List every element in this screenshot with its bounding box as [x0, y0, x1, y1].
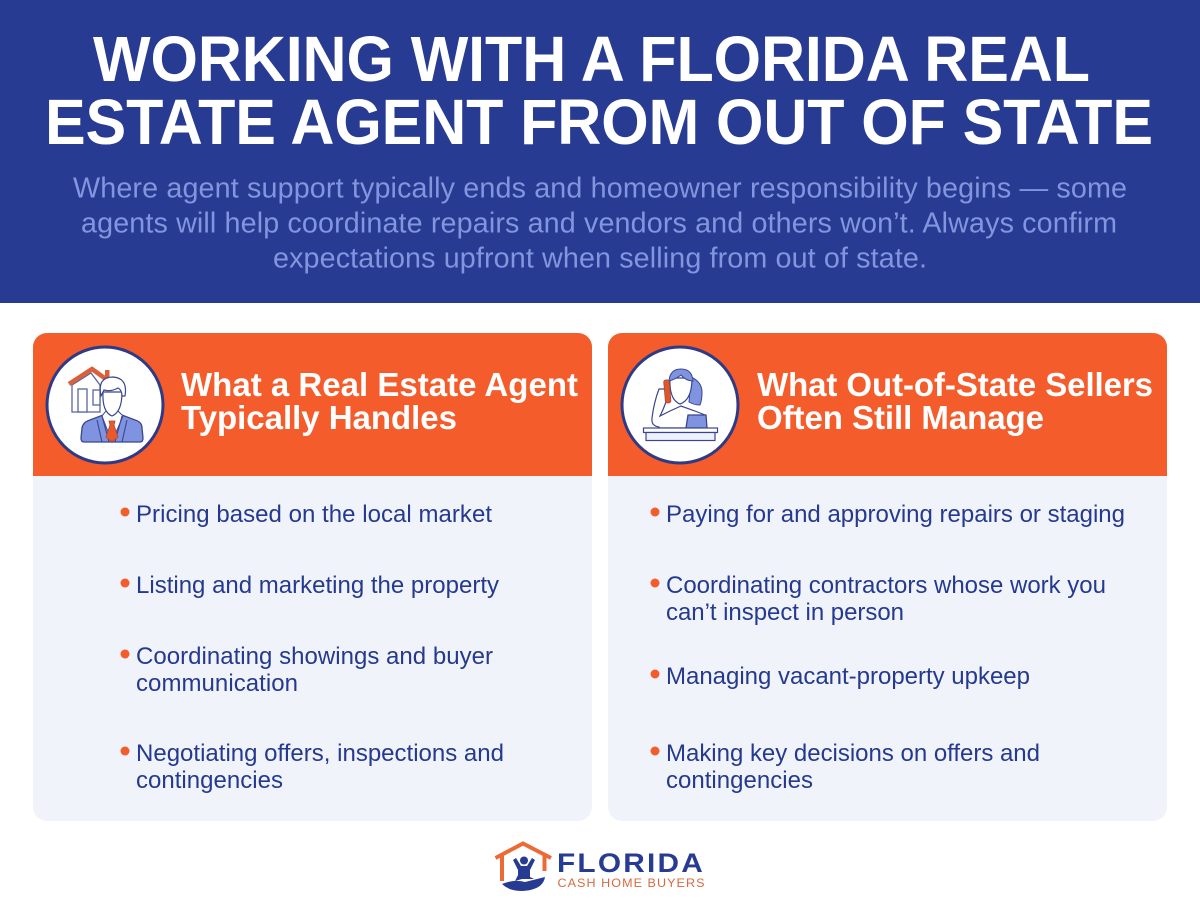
bullet list — [650, 501, 1125, 794]
bullet list: contingencies — [136, 767, 283, 794]
subtitle: agents will help coordinate repairs and vendors and others won’t. Always confirm — [81, 208, 1117, 240]
panel heading: What a Real Estate Agent — [181, 366, 578, 403]
panel heading: What Out-of-State Sellers — [757, 366, 1153, 403]
bullet list: Pricing based on the local market — [136, 501, 492, 528]
title — [45, 25, 1153, 158]
panel: agent handles — [33, 333, 592, 821]
wordmark: CASH HOME BUYERS — [558, 876, 706, 890]
panel: sellers manage — [608, 333, 1167, 821]
header banner — [0, 0, 1200, 303]
bullet list: Managing vacant-property upkeep — [666, 663, 1030, 690]
title: ESTATE AGENT FROM OUT OF STATE — [45, 88, 1153, 158]
bullet list: Coordinating contractors whose work you — [666, 572, 1106, 599]
icon: house with person and hand — [496, 844, 551, 891]
subtitle: expectations upfront when selling from out of state. — [273, 242, 927, 274]
subtitle: Where agent support typically ends and homeowner responsibility begins — some — [73, 172, 1127, 204]
panel heading — [757, 366, 1153, 436]
logo: Florida Cash Home Buyers — [496, 844, 706, 891]
bullet list: Coordinating showings and buyer — [136, 643, 493, 670]
bullet list — [120, 501, 504, 794]
bullet list: Making key decisions on offers and — [666, 740, 1040, 767]
icon: agent with house — [47, 347, 163, 463]
panel heading — [181, 366, 578, 436]
bullet list: Listing and marketing the property — [136, 572, 499, 599]
bullet list: Negotiating offers, inspections and — [136, 740, 504, 767]
icon: woman on phone at desk — [622, 347, 738, 463]
panel heading: Typically Handles — [181, 399, 457, 436]
bullet list: Paying for and approving repairs or staging — [666, 501, 1125, 528]
wordmark — [557, 848, 706, 890]
bullet list: communication — [136, 670, 298, 697]
bullet list: contingencies — [666, 767, 813, 794]
bullet list: can’t inspect in person — [666, 599, 904, 626]
panel heading: Often Still Manage — [757, 399, 1044, 436]
wordmark: FLORIDA — [557, 848, 705, 878]
subtitle — [73, 172, 1127, 274]
title: WORKING WITH A FLORIDA REAL — [93, 25, 1090, 95]
